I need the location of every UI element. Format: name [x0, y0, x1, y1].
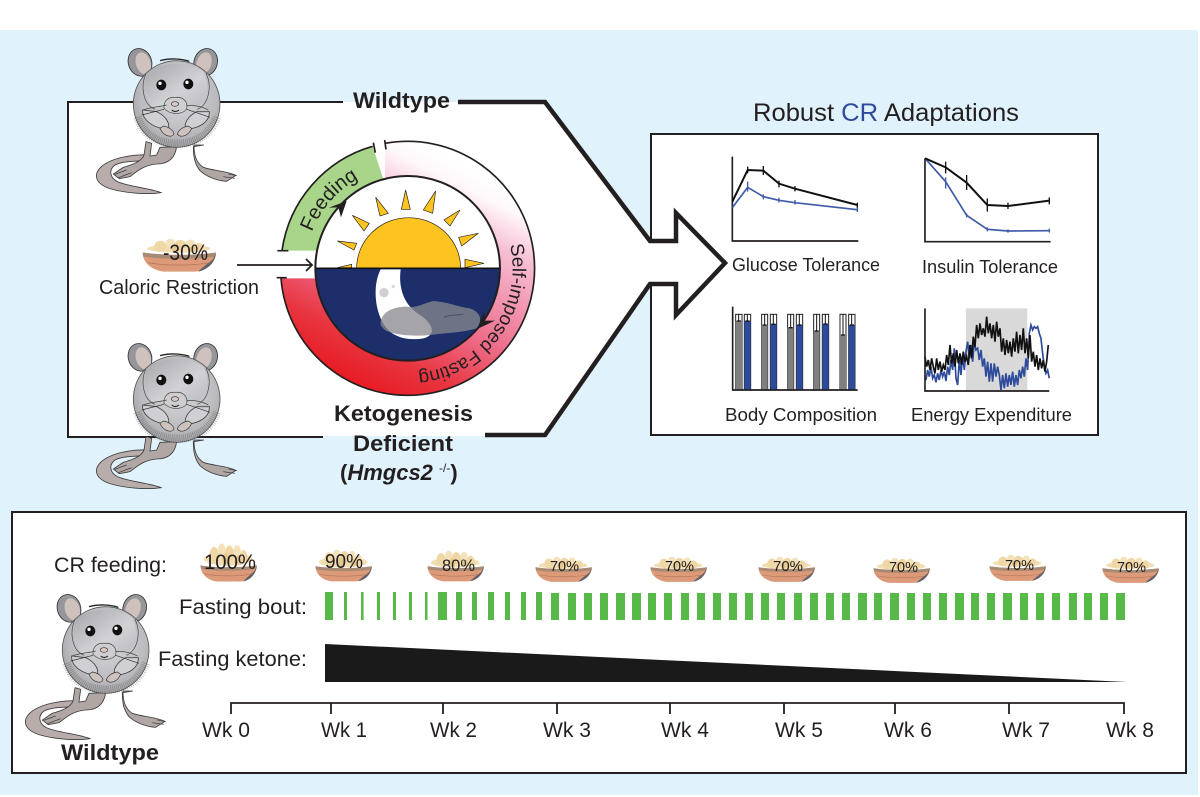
label: CR feeding: CR feeding: — [54, 554, 167, 577]
week labels: Wk 2 — [430, 719, 477, 742]
feeding arc — [282, 146, 383, 251]
night half — [315, 268, 500, 361]
bowl 70% week 4 — [651, 557, 707, 582]
bowl label: -30% — [163, 240, 208, 265]
heading: ketogenesis deficient: Ketogenesis — [334, 401, 473, 426]
week labels: Wk 0 — [202, 719, 250, 742]
bowl 90%: 90% — [325, 551, 363, 573]
heading: ketogenesis deficient: -/- — [439, 461, 450, 475]
label: insulin tolerance: Insulin Tolerance — [922, 257, 1058, 277]
bowl 70% week 4: 70% — [665, 558, 694, 575]
bowl 90% — [316, 550, 372, 581]
arrow into cycle — [237, 259, 312, 271]
bowl 70% week 5: 70% — [773, 558, 803, 575]
label: feeding: Feeding — [300, 170, 358, 230]
panel frame — [651, 134, 1098, 435]
bowl 70% week 3: 70% — [550, 558, 579, 575]
inner circle outline — [315, 176, 500, 361]
arrowhead: fasting — [477, 312, 495, 329]
large outcome arrow — [458, 102, 725, 435]
white arrow-shaped area — [68, 102, 725, 436]
chart: insulin tolerance — [925, 158, 1051, 242]
sleeping mouse silhouette — [381, 301, 480, 336]
bowl 80% — [428, 551, 484, 581]
bowl 70% week 8 — [1103, 557, 1159, 583]
mouse: ketogenesis deficient — [96, 340, 237, 489]
mouse: wildtype — [96, 45, 237, 194]
week labels: Wk 8 — [1106, 719, 1154, 742]
week axis — [231, 703, 1124, 714]
bowls row — [201, 544, 1159, 583]
week labels: Wk 5 — [775, 719, 823, 742]
mouse: timeline wildtype — [25, 591, 166, 740]
heading: ketogenesis deficient: ) — [450, 460, 458, 485]
week labels: Wk 4 — [661, 719, 709, 742]
label: body composition: Body Composition — [725, 405, 877, 425]
bowl 100%: 100% — [204, 551, 256, 574]
panel: timeline — [12, 512, 1186, 773]
cohort bracket line — [68, 102, 343, 437]
outer arc outlines — [277, 140, 535, 395]
day half with sky — [315, 176, 500, 268]
label: fasting bout: Fasting bout: — [179, 596, 307, 619]
horizon line — [315, 266, 500, 271]
label: energy expenditure: Energy Expenditure — [911, 405, 1072, 425]
heading: ketogenesis deficient: Deficient — [353, 431, 454, 456]
heading: wildtype: Wildtype — [353, 88, 450, 113]
bowl 70% week 6: 70% — [889, 559, 918, 576]
panel: CR adaptations — [651, 134, 1098, 435]
caloric restriction input — [99, 239, 312, 299]
chart: body composition — [733, 307, 858, 390]
week labels: Wk 6 — [884, 719, 932, 742]
self-imposed fasting arc — [281, 141, 535, 395]
chart: glucose tolerance — [732, 157, 858, 241]
circular feeding and fasting cycle — [276, 140, 536, 396]
label: self-imposed fasting: Self-imposed Fasting — [419, 244, 526, 383]
week labels — [202, 719, 1154, 742]
icon: food bowl — [143, 239, 216, 272]
bowl 70% week 3 — [536, 557, 592, 582]
label: fasting ketone: Fasting ketone: — [158, 648, 307, 671]
chart: energy expenditure — [925, 308, 1049, 391]
heading: ketogenesis deficient — [334, 401, 473, 485]
moon — [376, 269, 432, 339]
bowl 100% — [201, 544, 257, 581]
bowl 70% week 5 — [759, 557, 815, 582]
week labels: Wk 1 — [321, 719, 367, 742]
heading: ketogenesis deficient: (Hmgcs2 — [340, 460, 433, 485]
sun — [337, 190, 484, 268]
heading: robust CR adaptations: Robust CR Adaptations — [753, 99, 1019, 127]
caloric restriction label: Caloric Restriction — [99, 277, 259, 299]
bowl 70% week 7 — [990, 555, 1046, 581]
arrowhead: feeding — [329, 201, 347, 217]
bowl 70% week 8: 70% — [1117, 559, 1146, 576]
week labels: Wk 3 — [543, 719, 591, 742]
panel: top flow diagram — [67, 48, 728, 489]
label: timeline wildtype: Wildtype — [61, 740, 159, 765]
label: glucose tolerance: Glucose Tolerance — [732, 255, 880, 275]
week labels: Wk 7 — [1002, 719, 1050, 742]
bowl 70% week 7: 70% — [1005, 557, 1034, 574]
bowl 70% week 6 — [874, 558, 930, 583]
bowl 80%: 80% — [442, 556, 475, 575]
fasting bout bars — [325, 592, 1125, 620]
timeline frame — [12, 512, 1186, 773]
fasting ketone wedge — [325, 644, 1127, 682]
